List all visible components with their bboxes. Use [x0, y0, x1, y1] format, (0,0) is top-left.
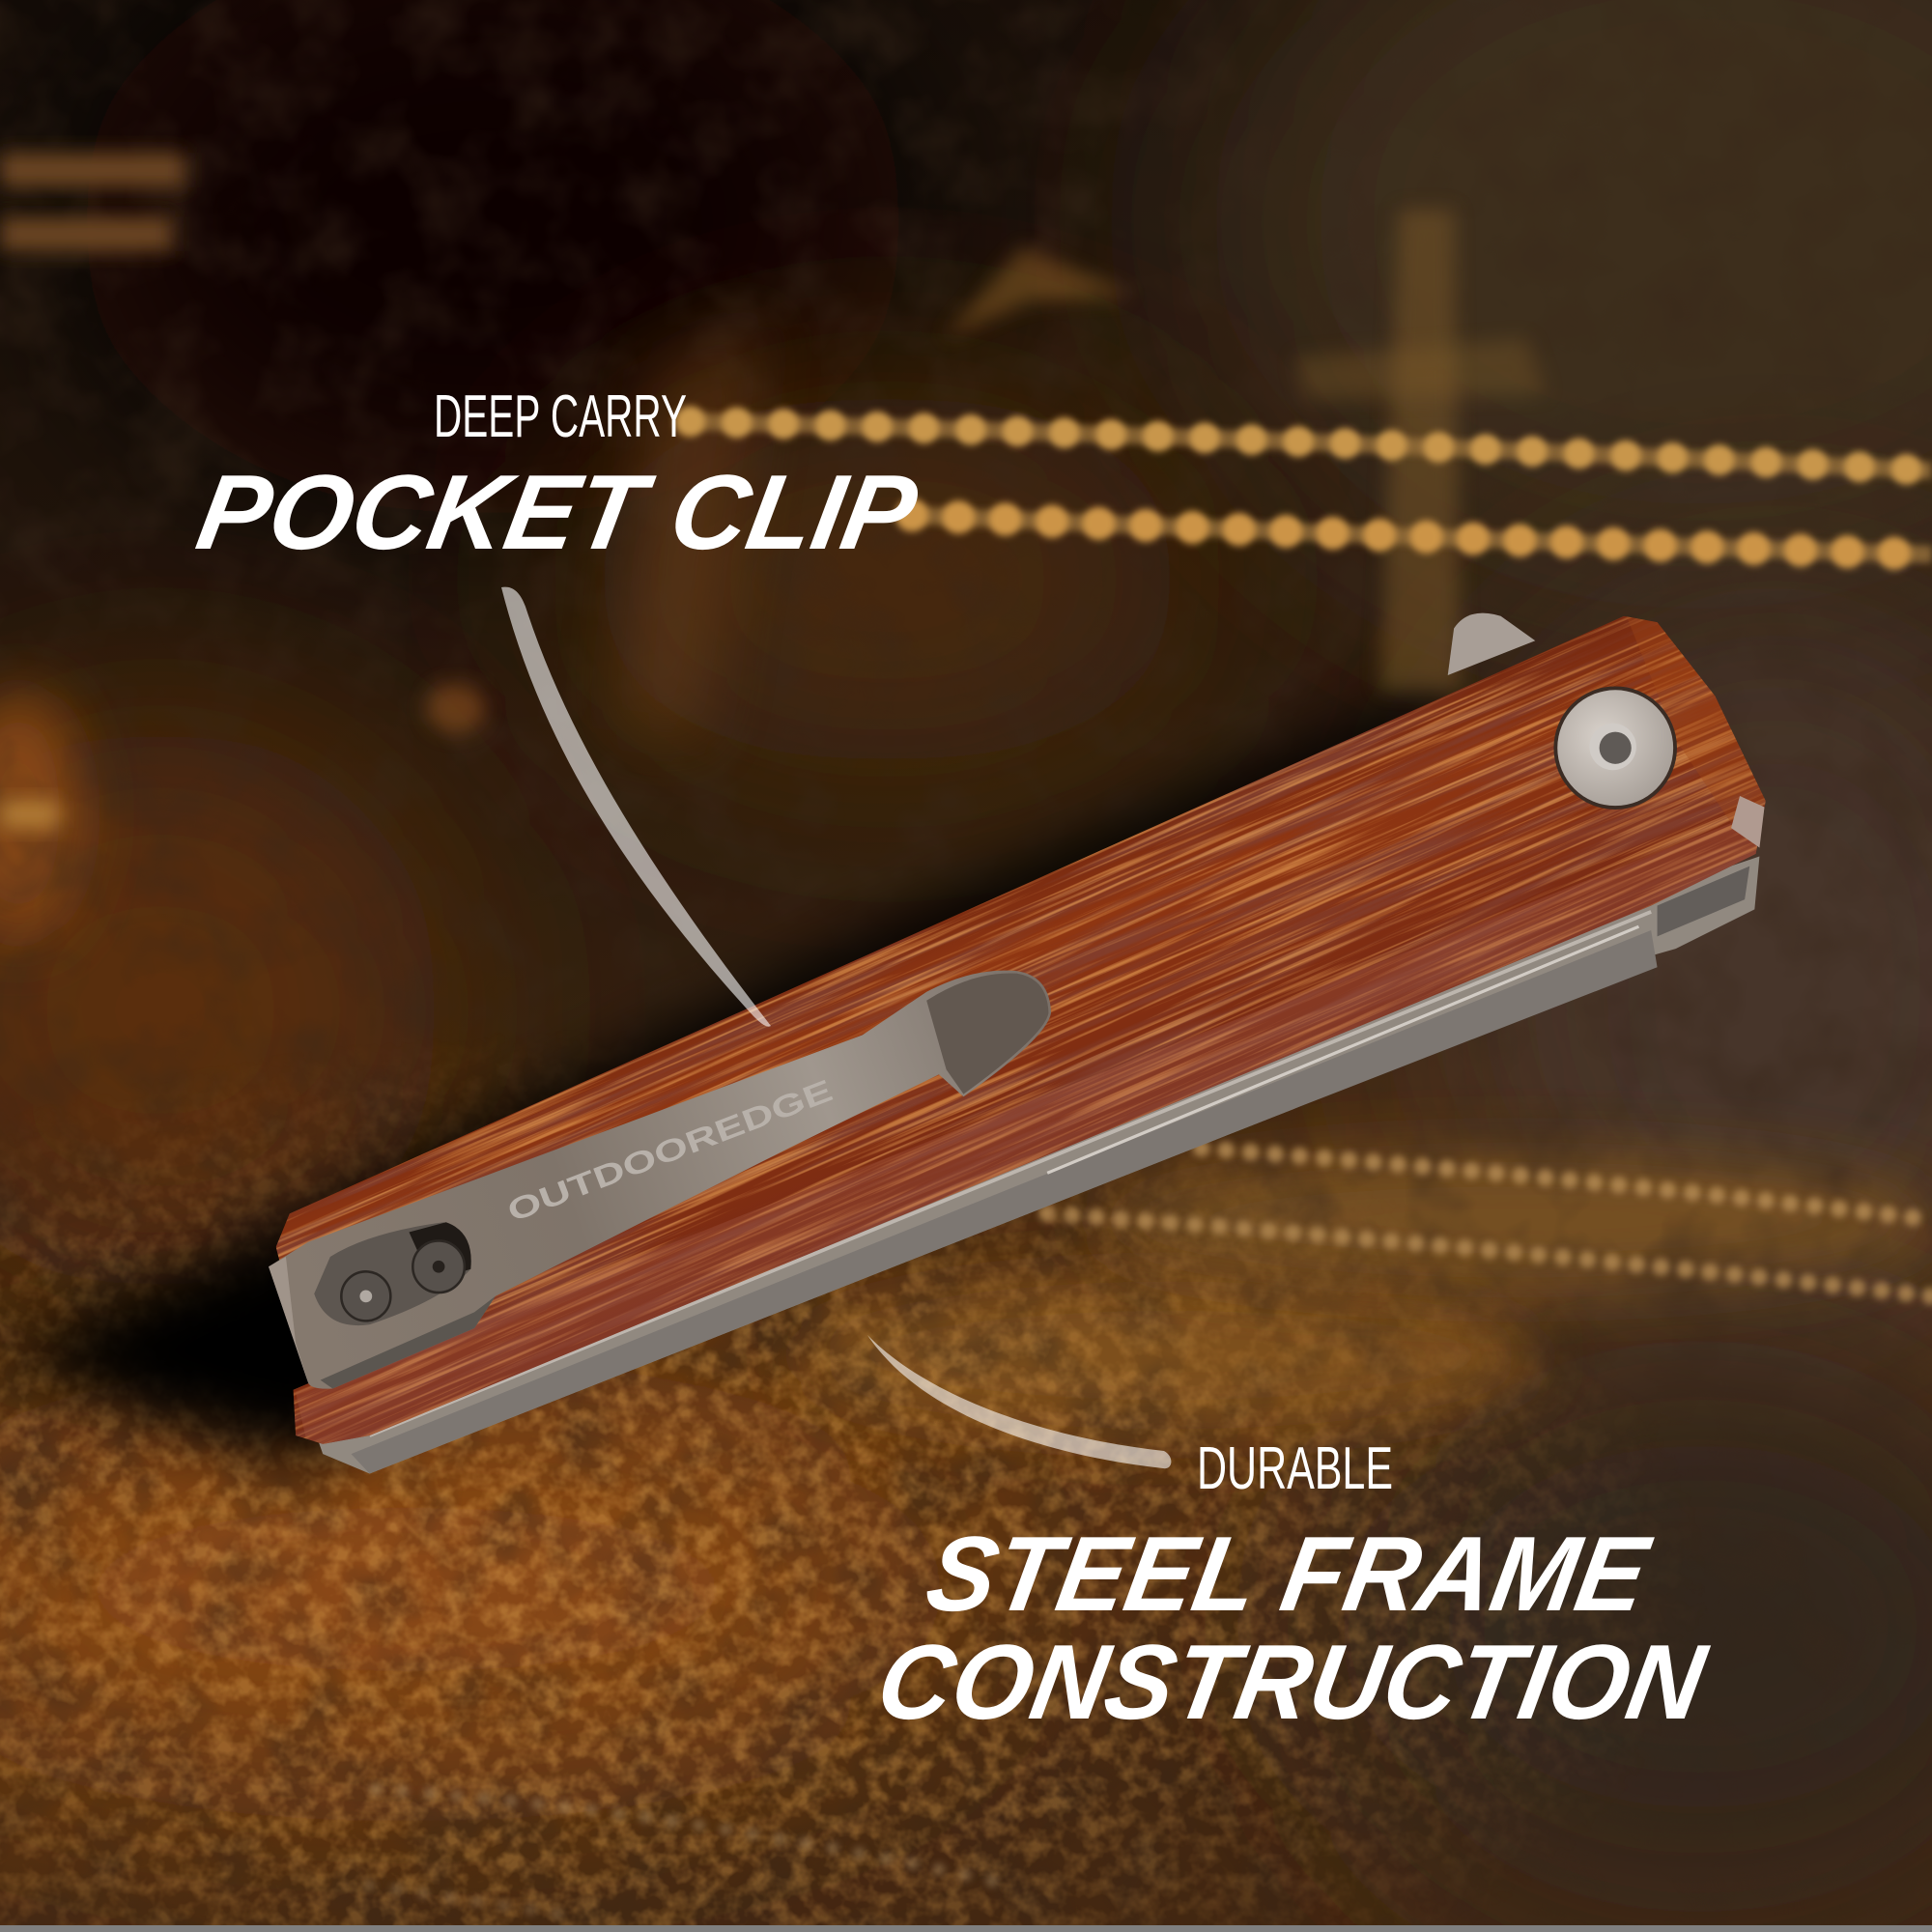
steel frame [314, 856, 1759, 1474]
clip logo: OUTDOOREDGE [502, 1072, 838, 1229]
wood lower facet [296, 823, 1766, 1448]
bottom grey strip [0, 1925, 1932, 1932]
vertical scuff band [1380, 210, 1460, 690]
label: durable steel frame construction [869, 1435, 1715, 1742]
callout line: pocket clip [501, 587, 771, 1027]
pocket clip [269, 971, 1051, 1389]
heading line two: CONSTRUCTION [869, 1624, 1715, 1742]
pivot screw [1553, 686, 1677, 810]
callout line: steel frame [867, 1335, 1171, 1468]
subheading: DEEP CARRY [434, 384, 687, 450]
bottom worn stitches [376, 1789, 1010, 1886]
lit bottom leather [0, 1430, 924, 1749]
heading line one: STEEL FRAME [919, 1516, 1659, 1634]
centre warm [579, 394, 1195, 764]
screw slot [314, 1222, 471, 1325]
heading: POCKET CLIP [189, 454, 925, 572]
subheading: DURABLE [1197, 1435, 1393, 1502]
blade flipper stud [1448, 613, 1535, 675]
bottom right dark [1331, 1331, 1932, 1922]
right leather [1454, 591, 1932, 1380]
knife cast shadow [0, 690, 1454, 1466]
left warm glow [0, 727, 443, 1293]
wood handle scale [276, 616, 1766, 1444]
clip screws [341, 1271, 390, 1321]
chipped corner [1731, 796, 1765, 848]
left dark top area [74, 0, 912, 518]
lower stitch rows [1202, 1149, 1932, 1220]
upper stitch rows [690, 421, 1932, 470]
upper right brown leather [1208, 0, 1932, 616]
knife [269, 612, 1766, 1474]
label: deep carry pocket clip [189, 384, 925, 572]
blurred left stitches [0, 153, 185, 187]
